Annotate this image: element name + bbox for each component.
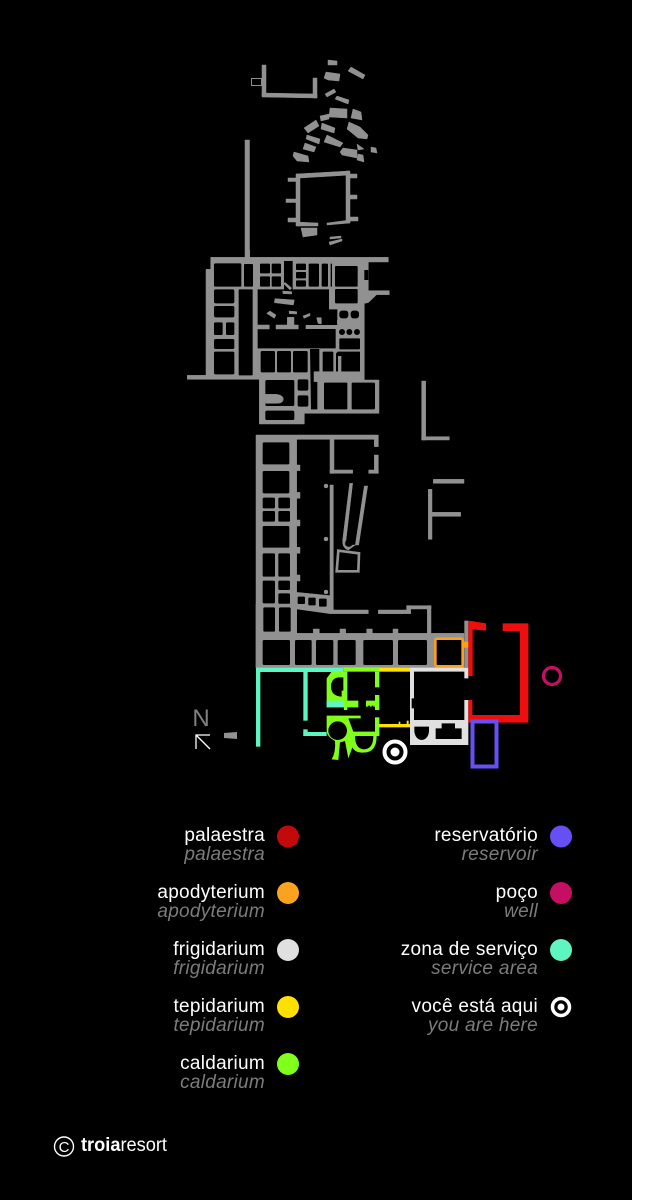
- legend item: tepidarium: tepidarium: [173, 1015, 265, 1036]
- north ruins: scattered blocks and square building: [245, 60, 377, 260]
- legend item: tepidarium: tepidarium: [173, 996, 265, 1017]
- site plan: [187, 60, 561, 766]
- zone: tepidarium: [379, 668, 410, 727]
- legend item: frigidarium: frigidarium: [173, 939, 265, 960]
- legend item: well: well: [504, 901, 538, 922]
- zone: palaestra: [468, 621, 528, 723]
- legend item: reservoir: reservoir: [462, 844, 538, 865]
- logo: troiaresort: C: [59, 1139, 70, 1156]
- zone: frigidarium: [410, 668, 468, 745]
- legend item: apodyterium: [157, 882, 299, 922]
- you are here marker: [384, 742, 406, 762]
- north letter: N: [192, 705, 210, 732]
- legend item: well: poço: [496, 882, 538, 903]
- zone: service area: [256, 668, 343, 747]
- south wing with portico: [256, 381, 464, 668]
- zone: well: [544, 668, 560, 684]
- legend item: tepidarium: [173, 996, 299, 1036]
- legend item: palaestra: palaestra: [184, 825, 265, 846]
- legend item: you are here: você está aqui: [412, 996, 538, 1017]
- legend item: you are here: you are here: [426, 1015, 538, 1036]
- zone: reservoir: [472, 722, 496, 766]
- legend item: caldarium: [180, 1053, 299, 1093]
- north indicator: [192, 705, 237, 749]
- legend: right column: [401, 825, 572, 1036]
- central building block: [187, 250, 389, 424]
- legend item: apodyterium: apodyterium: [157, 882, 265, 903]
- legend item: palaestra: [183, 825, 299, 865]
- legend item: reservoir: [434, 825, 572, 865]
- legend item: palaestra: palaestra: [183, 844, 265, 865]
- legend item: you are here: [412, 996, 570, 1036]
- zone: apodyterium: [435, 621, 468, 668]
- legend item: service area: service area: [431, 958, 538, 979]
- legend item: service area: [401, 939, 572, 979]
- legend item: reservoir: reservatório: [434, 825, 538, 846]
- zone: caldarium: [327, 667, 379, 760]
- lower gallery range: [256, 604, 464, 668]
- north arrow: [196, 735, 210, 749]
- logo: troiaresort: troiaresort: [81, 1135, 168, 1156]
- legend item: frigidarium: frigidarium: [173, 958, 265, 979]
- legend item: frigidarium: [173, 939, 299, 979]
- legend item: caldarium: caldarium: [180, 1053, 265, 1074]
- legend item: service area: zona de serviço: [401, 939, 538, 960]
- gray block near north arrow: [224, 732, 237, 739]
- legend item: well: [496, 882, 572, 922]
- legend item: caldarium: caldarium: [180, 1072, 265, 1093]
- legend: left column: [157, 825, 299, 1093]
- legend item: apodyterium: apodyterium: [157, 901, 265, 922]
